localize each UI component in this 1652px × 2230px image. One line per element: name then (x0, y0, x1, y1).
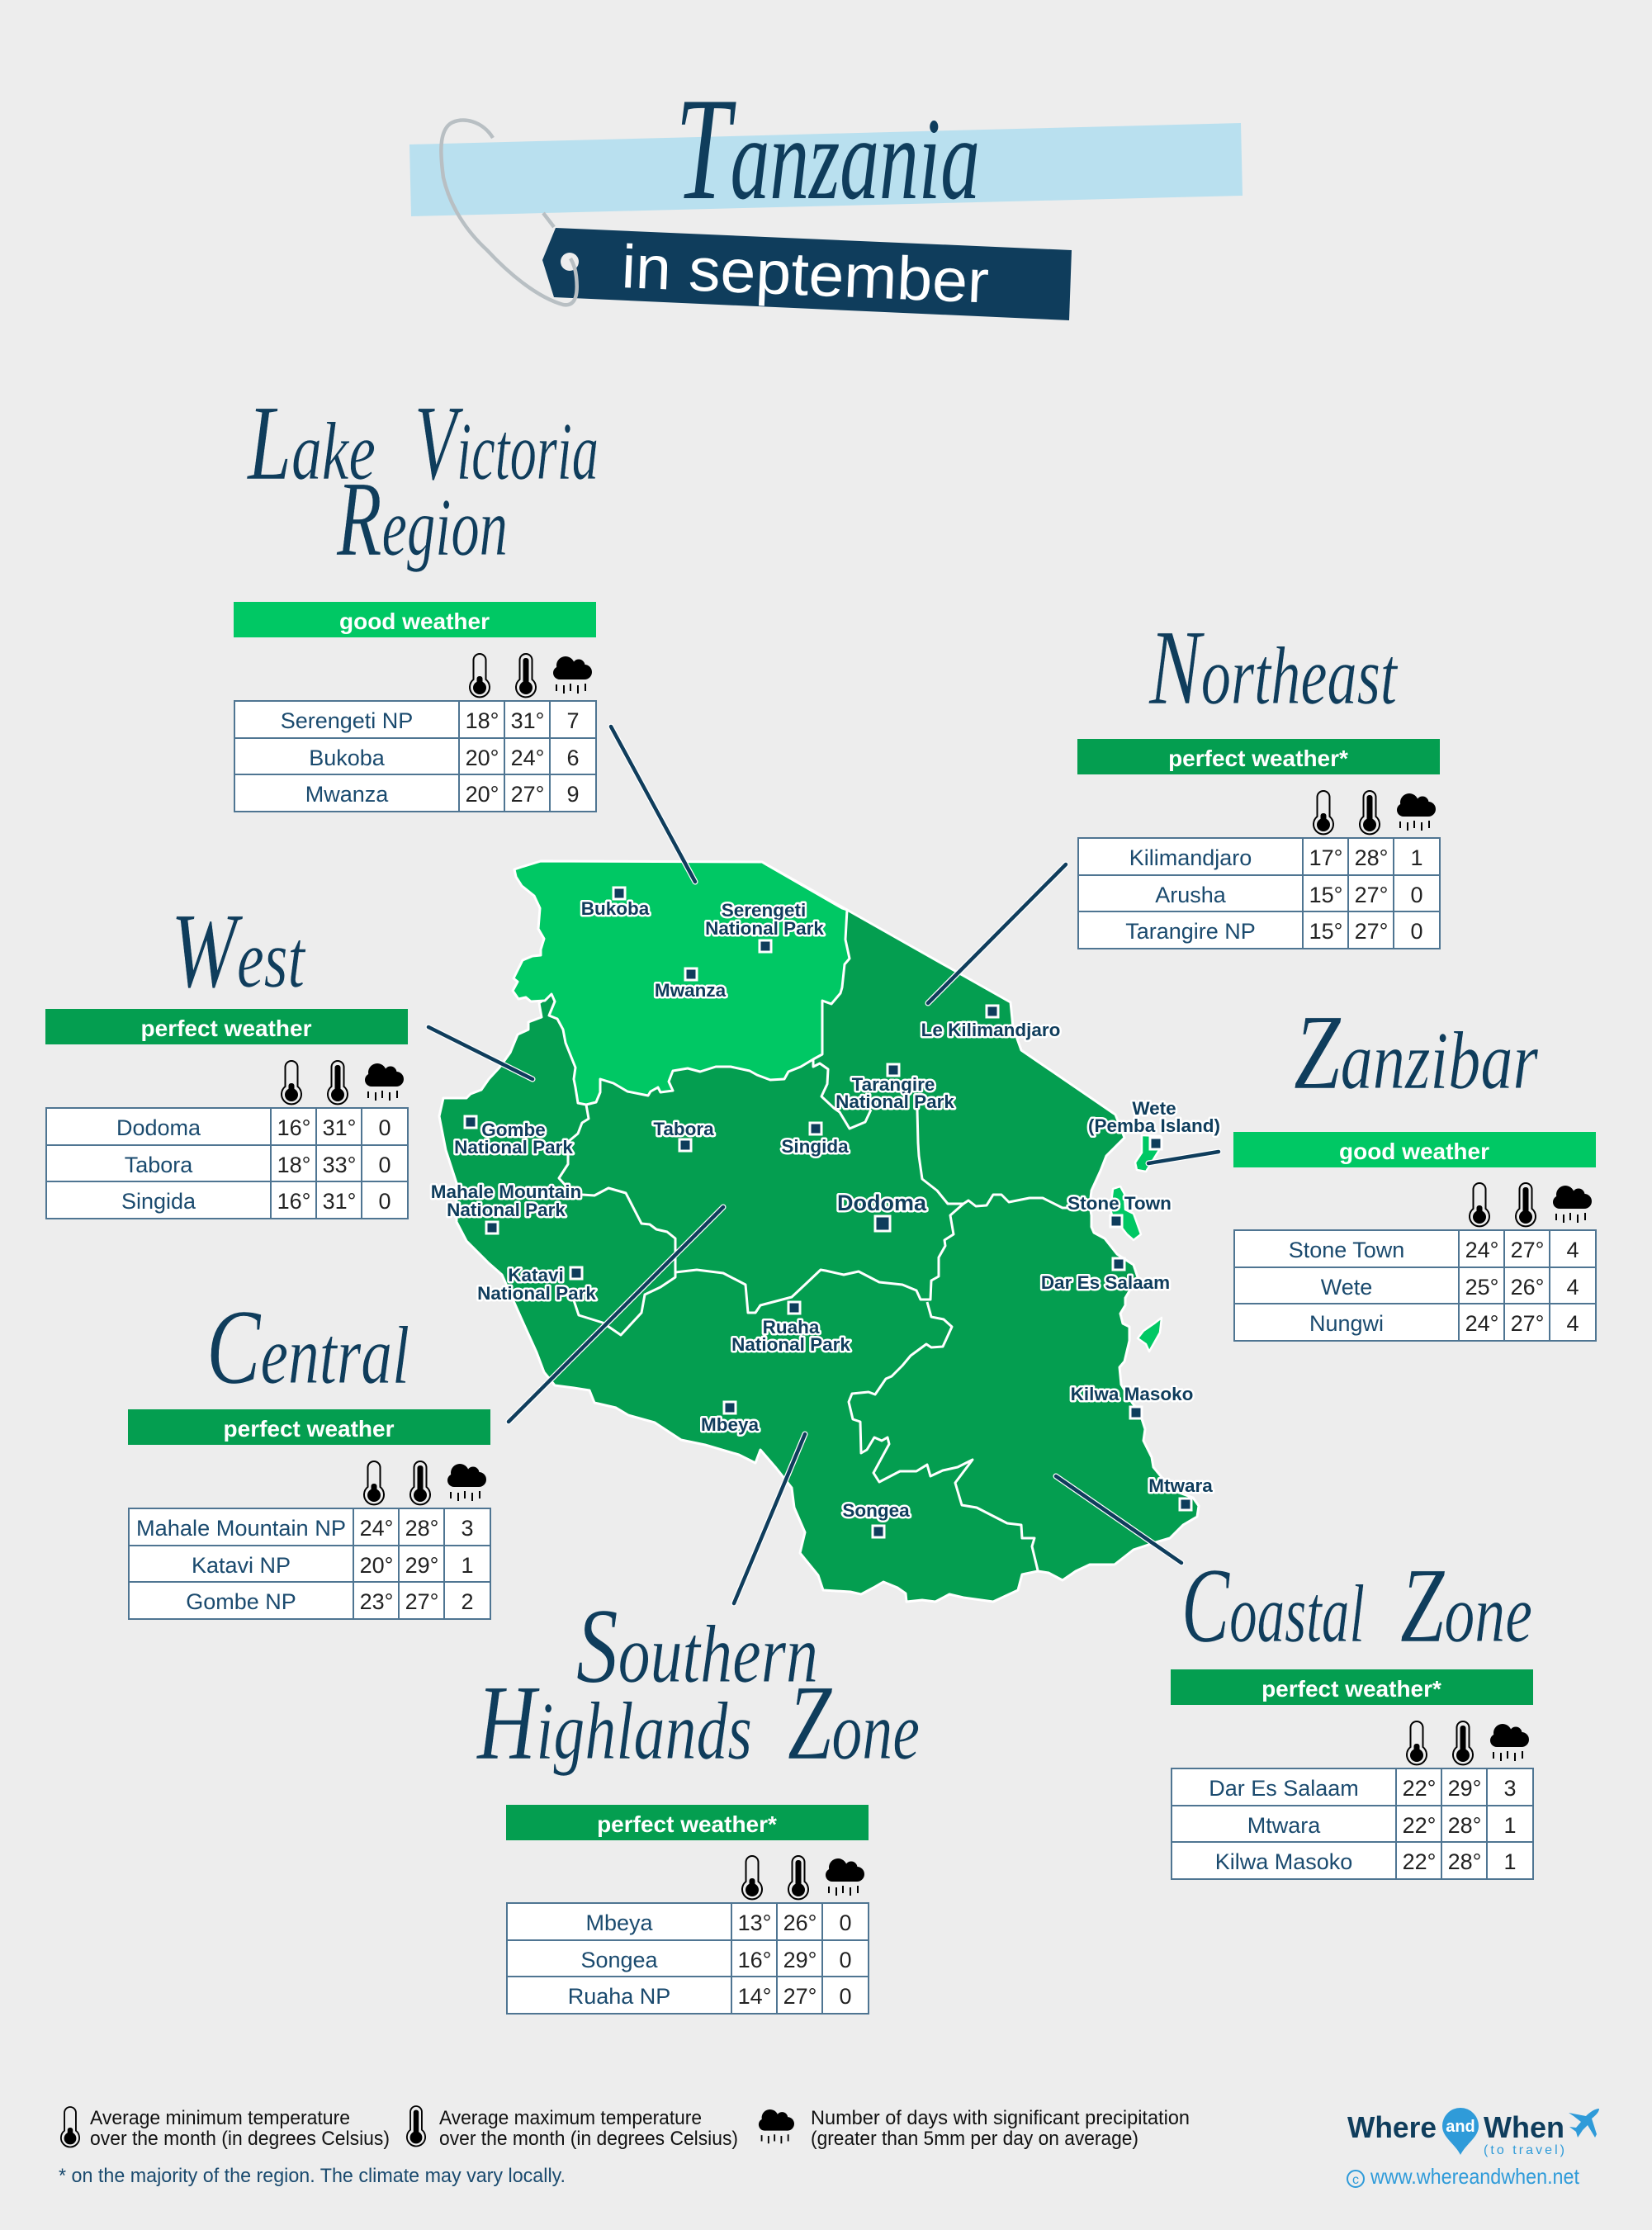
table: 27° (1355, 919, 1388, 944)
table: Singida (121, 1189, 196, 1214)
table (129, 1461, 490, 1619)
table: 25° (1465, 1275, 1498, 1300)
panel: Southern Highlands Zone (476, 1587, 920, 2014)
heading: Region (336, 460, 508, 579)
table: Dodoma (116, 1115, 201, 1140)
place names: Wete (1132, 1098, 1176, 1119)
place names: Songea (842, 1500, 910, 1521)
table: 28° (1355, 845, 1388, 870)
table: 18° (277, 1153, 310, 1177)
heading: Southern (576, 1587, 818, 1706)
icon: airplane (1569, 2109, 1599, 2138)
table (507, 1856, 869, 2014)
place names: Mbeya (701, 1414, 759, 1435)
table: 28° (405, 1516, 438, 1541)
place names: Tarangire (852, 1074, 935, 1095)
heading: Northeast (1148, 608, 1399, 727)
place names: Mwanza (655, 980, 727, 1001)
table: 24° (1465, 1311, 1498, 1336)
table: 26° (783, 1910, 817, 1935)
panel: Northeast (1077, 608, 1440, 949)
rating bar (1077, 739, 1440, 774)
map of Tanzania (439, 861, 1199, 1602)
table: 28° (1448, 1849, 1481, 1874)
luggage tag (542, 228, 1072, 320)
place names: Singida (781, 1136, 849, 1157)
table: Katavi NP (192, 1553, 291, 1578)
panel: Coastal Zone (1171, 1546, 1533, 1879)
logo: Where and When: Where (1347, 2110, 1437, 2144)
rating bar: good weather (339, 608, 490, 634)
logo: Where and When (1347, 2108, 1599, 2189)
table: 13° (738, 1910, 771, 1935)
table: Nungwi (1309, 1311, 1384, 1336)
legend (59, 2106, 1190, 2187)
table: 0 (1410, 919, 1423, 944)
table: 6 (566, 746, 580, 770)
table: 1 (1503, 1849, 1517, 1874)
zone: Lake Victoria region (513, 861, 850, 1105)
table: Songea (580, 1948, 659, 1972)
place names: Dodoma (837, 1191, 927, 1215)
table: 27° (1355, 883, 1388, 907)
table: 4 (1566, 1275, 1579, 1300)
table (1078, 791, 1440, 949)
table: 24° (360, 1516, 393, 1541)
table: 7 (566, 708, 580, 733)
heading: Highlands (476, 1664, 752, 1783)
table: Ruaha NP (568, 1984, 670, 2009)
icon: map pin (1442, 2108, 1479, 2155)
place names: Gombe (481, 1120, 546, 1140)
rating bar: perfect weather* (1261, 1676, 1441, 1702)
place names: Le Kilimandjaro (921, 1020, 1060, 1040)
legend: precipitation (759, 2107, 1190, 2150)
legend: minimum temperature: Average minimum temperature (90, 2107, 350, 2129)
place names: Dar Es Salaam (1041, 1272, 1170, 1293)
leader lines from zones to panels (428, 727, 1219, 1603)
table: 3 (1503, 1776, 1517, 1801)
table: 27° (783, 1984, 817, 2009)
place names: Mahale Mountain (431, 1181, 581, 1202)
islands: Pemba, Unguja, Mafia (1110, 1135, 1162, 1352)
table: 0 (378, 1189, 391, 1214)
zone borders (559, 1059, 1090, 1570)
heading: Victoria (414, 384, 599, 503)
table: 27° (1511, 1311, 1544, 1336)
table: 1 (1410, 845, 1423, 870)
country: dark green zones (439, 862, 1199, 1602)
table: Mahale Mountain NP (136, 1516, 346, 1541)
heading: Zanzibar (1294, 993, 1539, 1112)
table: Serengeti NP (281, 708, 413, 733)
legend: minimum temperature: over the month (in degrees Celsius) (90, 2128, 390, 2150)
table: Dar Es Salaam (1209, 1776, 1359, 1801)
tag string (441, 120, 577, 305)
legend: maximum temperature (407, 2106, 738, 2150)
place names: Bukoba (581, 898, 650, 919)
rating bar: perfect weather (141, 1016, 312, 1041)
legend: maximum temperature: Average maximum temperature (439, 2107, 702, 2129)
table: 31° (323, 1189, 356, 1214)
logo: Where and When: When (1484, 2110, 1564, 2144)
table: 0 (839, 1948, 852, 1972)
legend: minimum temperature (61, 2107, 390, 2150)
tag hole (561, 253, 579, 271)
table: 29° (783, 1948, 817, 1972)
legend: precipitation: Number of days with significant precipitation (811, 2107, 1190, 2129)
legend: precipitation: (greater than 5mm per day on average) (811, 2128, 1138, 2150)
place names: National Park (731, 1334, 850, 1355)
panel: Zanzibar (1233, 993, 1596, 1341)
icon: copyright: c (1352, 2173, 1359, 2187)
table: Bukoba (309, 746, 386, 770)
table: Arusha (1155, 883, 1227, 907)
table (1234, 1183, 1596, 1341)
place names: Mtwara (1148, 1475, 1213, 1496)
place names: (Pemba Island) (1088, 1115, 1220, 1136)
table: 14° (738, 1984, 771, 2009)
table: 24° (1465, 1238, 1498, 1262)
rating bar (234, 602, 596, 637)
table: 3 (461, 1516, 474, 1541)
table: 29° (405, 1553, 438, 1578)
rating bar (506, 1805, 869, 1840)
table: 2 (461, 1589, 474, 1614)
table: Stone Town (1289, 1238, 1404, 1262)
place names: Tabora (653, 1119, 714, 1139)
place names: National Park (454, 1137, 573, 1158)
table: 31° (323, 1115, 356, 1140)
place names: Kilwa Masoko (1071, 1384, 1193, 1404)
table: 24° (511, 746, 544, 770)
table: 27° (511, 782, 544, 807)
table: 0 (1410, 883, 1423, 907)
place names (431, 898, 1220, 1521)
table: 20° (466, 782, 499, 807)
subtitle: in september (620, 232, 990, 316)
heading (476, 1587, 920, 1783)
table (46, 1061, 408, 1219)
rating bar: perfect weather (224, 1416, 395, 1442)
table: 29° (1448, 1776, 1481, 1801)
table: 22° (1403, 1849, 1436, 1874)
table: 33° (323, 1153, 356, 1177)
table: Kilwa Masoko (1215, 1849, 1352, 1874)
table (1172, 1721, 1533, 1879)
icon: copyright (1347, 2171, 1364, 2187)
footnote: * on the majority of the region. The climate may vary locally. (59, 2165, 566, 2187)
table: 9 (566, 782, 580, 807)
marker squares (465, 888, 1191, 1537)
table: 4 (1566, 1238, 1579, 1262)
table: 27° (1511, 1238, 1544, 1262)
rating bar: good weather (1339, 1139, 1489, 1164)
table: Kilimandjaro (1129, 845, 1252, 870)
panel: West (45, 892, 408, 1219)
table: 20° (360, 1553, 393, 1578)
rating bar (45, 1009, 408, 1044)
logo: Where and When: (to travel) (1484, 2143, 1564, 2157)
table: 16° (277, 1189, 310, 1214)
title block (409, 67, 1243, 320)
place names: Katavi (508, 1265, 564, 1285)
table: Wete (1321, 1275, 1372, 1300)
map labels and markers (431, 888, 1220, 1537)
table: 1 (1503, 1813, 1517, 1838)
rating bar: perfect weather* (597, 1811, 777, 1837)
table: 26° (1511, 1275, 1544, 1300)
table: 1 (461, 1553, 474, 1578)
panel: Lake Victoria Region (234, 384, 599, 812)
table: Gombe NP (186, 1589, 296, 1614)
place names: Ruaha (763, 1317, 820, 1338)
table: 18° (466, 708, 499, 733)
heading: Zone (1400, 1546, 1532, 1665)
place names: Stone Town (1067, 1193, 1172, 1214)
heading: Central (206, 1288, 409, 1407)
heading: Coastal (1181, 1546, 1365, 1665)
table: 16° (738, 1948, 771, 1972)
logo: Where and When: and (1446, 2118, 1475, 2136)
heading (247, 384, 599, 579)
heading: Zone (788, 1664, 920, 1783)
table: 22° (1403, 1776, 1436, 1801)
panel: Central (128, 1288, 490, 1619)
table: 22° (1403, 1813, 1436, 1838)
table: Mwanza (305, 782, 389, 807)
place names: National Park (835, 1091, 954, 1112)
title: Tanzania: Tanzania (675, 67, 980, 230)
table: 20° (466, 746, 499, 770)
place names: National Park (477, 1283, 596, 1304)
table: 0 (378, 1115, 391, 1140)
rating bar (1171, 1669, 1533, 1705)
table: Tabora (125, 1153, 193, 1177)
table: 23° (360, 1589, 393, 1614)
table (234, 654, 596, 812)
table: 0 (839, 1910, 852, 1935)
table: 15° (1309, 883, 1342, 907)
table: Mtwara (1247, 1813, 1321, 1838)
table: 4 (1566, 1311, 1579, 1336)
table: Tarangire NP (1125, 919, 1256, 944)
heading: West (171, 892, 306, 1011)
title band (409, 123, 1243, 216)
rating bar (128, 1409, 490, 1445)
table: 27° (405, 1589, 438, 1614)
place names: National Park (447, 1200, 566, 1220)
rating bar (1233, 1132, 1596, 1167)
place names: Serengeti (722, 900, 806, 921)
table: 16° (277, 1115, 310, 1140)
table: 0 (839, 1984, 852, 2009)
heading: Lake (247, 384, 376, 503)
table: Mbeya (585, 1910, 654, 1935)
table: 28° (1448, 1813, 1481, 1838)
place names: National Park (705, 918, 824, 939)
rating bar: perfect weather* (1168, 746, 1348, 771)
table: 31° (511, 708, 544, 733)
logo: Where and When: www.whereandwhen.net (1370, 2164, 1580, 2189)
table: 15° (1309, 919, 1342, 944)
table: 17° (1309, 845, 1342, 870)
table: 0 (378, 1153, 391, 1177)
legend: maximum temperature: over the month (in degrees Celsius) (439, 2128, 738, 2150)
